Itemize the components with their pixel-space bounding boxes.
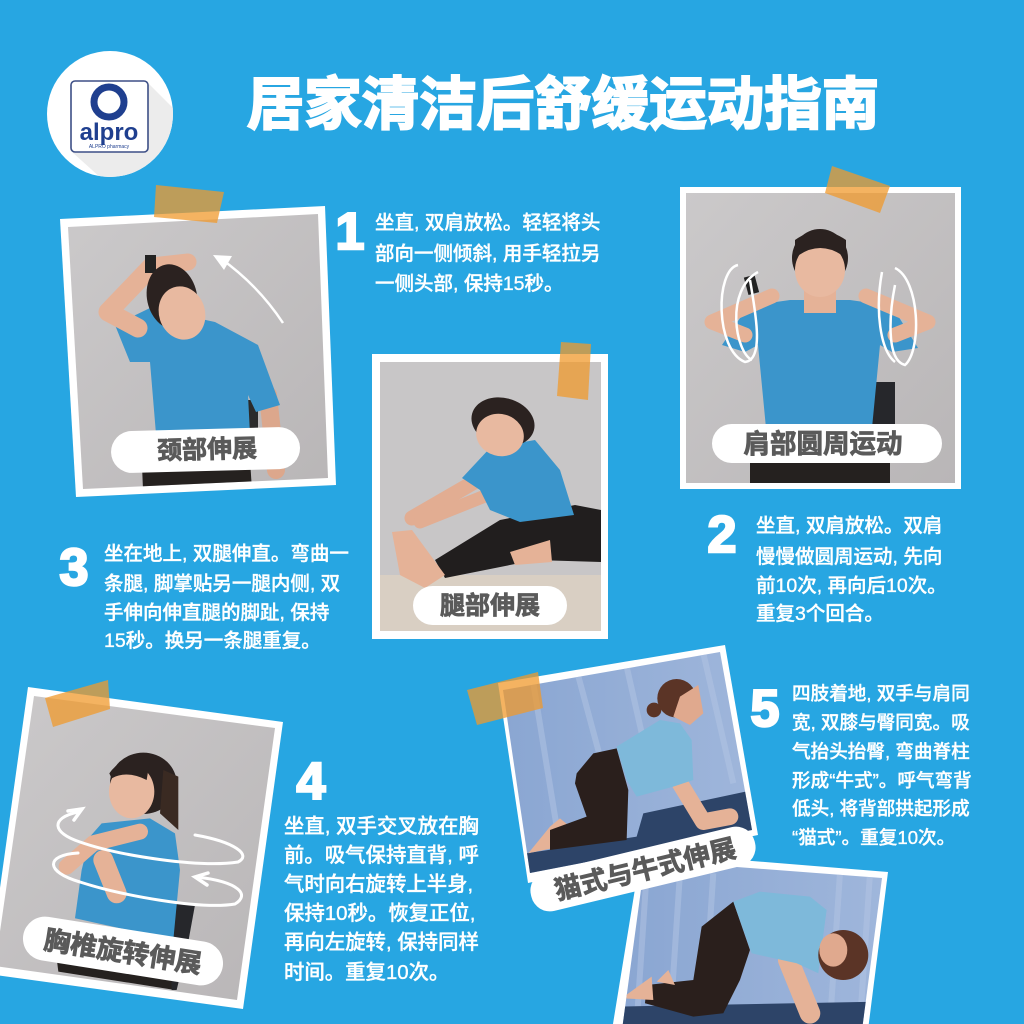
text block: step 5: 气抬头抬臀, 弯曲脊柱 — [792, 741, 970, 762]
tape: thoracic photo — [45, 680, 110, 727]
text block: step 3: 手伸向伸直腿的脚趾, 保持 — [104, 602, 329, 624]
label: leg stretch — [413, 586, 567, 625]
text block: step 4: 前。吸气保持直背, 呼 — [284, 844, 479, 867]
number 2: 2 — [708, 506, 736, 564]
number 3: 3 — [60, 539, 88, 597]
label: neck stretch — [111, 427, 301, 473]
label: neck stretch: 颈部伸展 — [157, 435, 257, 465]
text block: step 2: 重复3个回合。 — [756, 603, 884, 625]
label: thoracic rotation — [20, 913, 226, 989]
text block: step 5: 宽, 双膝与臀同宽。吸 — [792, 712, 970, 733]
text block: step 5: 低头, 将背部拱起形成 — [792, 798, 970, 819]
text block: step 4: 气时向右旋转上半身, — [284, 873, 473, 896]
text block: step 5: “猫式”。重复10次。 — [792, 827, 955, 848]
label: shoulder circles — [712, 424, 942, 463]
logo: alpro pharmacy: alpro — [80, 119, 138, 146]
panel: neck stretch photo — [60, 206, 336, 497]
number 5: 5 — [751, 680, 779, 738]
arrow: neck tilt direction — [213, 255, 283, 323]
logo: alpro pharmacy — [47, 51, 173, 177]
text block: step 3: 坐在地上, 双腿伸直。弯曲一 — [104, 543, 349, 565]
label: cat and cow — [527, 823, 759, 915]
text block: step 1: 坐直, 双肩放松。轻轻将头 — [375, 212, 600, 234]
text block: step 2: 慢慢做圆周运动, 先向 — [756, 546, 942, 568]
tape: shoulder photo — [825, 166, 890, 213]
label: thoracic rotation: 胸椎旋转伸展 — [42, 925, 204, 979]
text block: step 4: 坐直, 双手交叉放在胸 — [284, 815, 479, 838]
label: shoulder circles: 肩部圆周运动 — [744, 429, 902, 459]
number 4: 4 — [297, 753, 326, 811]
text block: step 5: 四肢着地, 双手与肩同 — [792, 683, 970, 704]
panel: cat pose photo — [612, 852, 888, 1024]
text block: step 2: 前10次, 再向后10次。 — [756, 575, 947, 597]
icon: shoulder rotation swirls — [722, 265, 916, 365]
text block: step 4: 保持10秒。恢复正位, — [284, 902, 475, 925]
panel: shoulder circles photo — [680, 187, 961, 489]
tape: leg photo — [557, 342, 591, 400]
panel: cow pose photo — [498, 645, 758, 883]
text block: step 3: 15秒。换另一条腿重复。 — [104, 630, 321, 652]
icon: rotation swirls — [53, 809, 243, 905]
text block: step 4: 再向左旋转, 保持同样 — [284, 931, 479, 954]
text block: step 3: 条腿, 脚掌贴另一腿内侧, 双 — [104, 573, 340, 595]
text block: step 1: 部向一侧倾斜, 用手轻拉另 — [375, 243, 600, 265]
text block: step 4: 时间。重复10次。 — [284, 961, 449, 984]
panel: thoracic rotation photo — [0, 687, 283, 1009]
number 1: 1 — [336, 203, 364, 261]
text block: step 1: 一侧头部, 保持15秒。 — [375, 273, 564, 295]
text block: step 2: 坐直, 双肩放松。双肩 — [756, 515, 942, 537]
title: 居家清洁后舒缓运动指南 — [247, 73, 879, 137]
text block: step 5: 形成“牛式”。呼气弯背 — [792, 770, 972, 791]
tape: cow photo — [467, 672, 543, 725]
panel: leg stretch photo — [372, 354, 608, 639]
label: leg stretch: 腿部伸展 — [440, 592, 540, 620]
label: cat and cow: 猫式与牛式伸展 — [551, 833, 739, 906]
tape: neck photo — [154, 185, 224, 223]
logo: alpro pharmacy: ALPRO pharmacy — [89, 144, 130, 150]
